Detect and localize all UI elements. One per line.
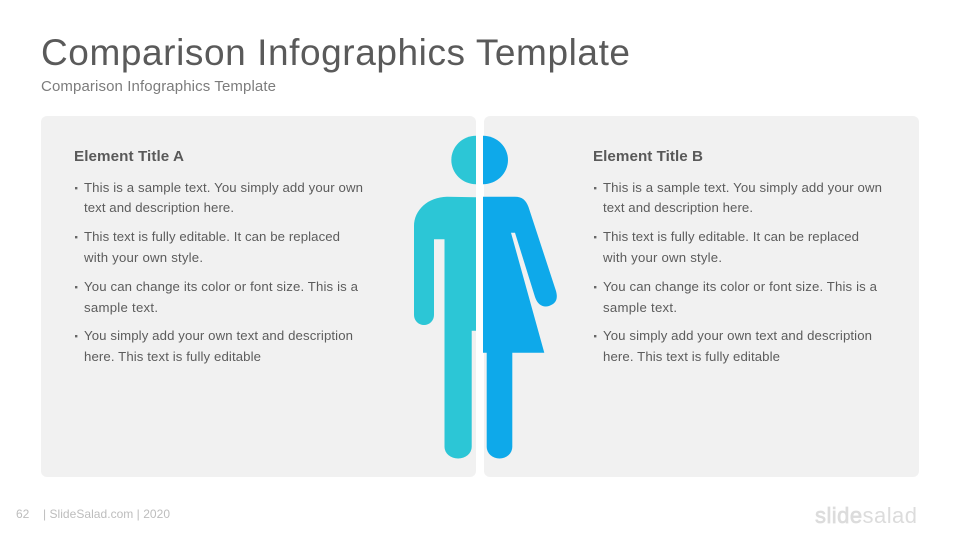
bullet item A4: here. This text is fully editable (84, 349, 261, 364)
panel: element B background (484, 116, 919, 477)
bullet item B3: sample text. (603, 300, 677, 315)
bullet item A1: text and description here. (84, 200, 234, 215)
icon: female half figure (483, 136, 557, 459)
bullet item B1: text and description here. (603, 200, 753, 215)
bullet item B1: This is a sample text. You simply add your own (603, 180, 882, 195)
bullet item A1 (75, 180, 363, 215)
heading: Element Title B: Element Title B (593, 148, 703, 165)
bullet item B2: This text is fully editable. It can be replaced (603, 229, 859, 244)
heading: Element Title A: Element Title A (74, 148, 184, 165)
panel: element A background (41, 116, 476, 477)
bullet item B2 (594, 229, 859, 265)
title: Comparison Infographics Template (41, 32, 630, 73)
bullet item A3: You can change its color or font size. This is a (84, 279, 359, 294)
icon: male half figure (414, 136, 476, 459)
bullet item A3 (75, 279, 359, 315)
bullet item A2 (75, 229, 340, 265)
bullet item A3: sample text. (84, 300, 158, 315)
bullet item A1: This is a sample text. You simply add your own (84, 180, 363, 195)
text block: element A (74, 148, 363, 364)
bullet item B4: here. This text is fully editable (603, 349, 780, 364)
text block: element B (593, 148, 882, 364)
bullet item A4 (75, 328, 353, 364)
bullet item A2: with your own style. (83, 250, 203, 265)
bullet item B3: You can change its color or font size. This is a (603, 279, 878, 294)
subtitle: Comparison Infographics Template (41, 78, 276, 95)
bullet item B4 (594, 328, 872, 364)
bullet item B4: You simply add your own text and description (603, 328, 872, 343)
bullet item A4: You simply add your own text and description (84, 328, 353, 343)
bullet item B3 (594, 279, 878, 315)
bullet item A2: This text is fully editable. It can be replaced (84, 229, 340, 244)
bullet item B2: with your own style. (602, 250, 722, 265)
bullet item B1 (594, 180, 882, 215)
page number: 62 (16, 507, 30, 521)
logo: slidesalad: slidesalad (815, 503, 917, 528)
footer text: | SlideSalad.com | 2020 (43, 507, 170, 521)
